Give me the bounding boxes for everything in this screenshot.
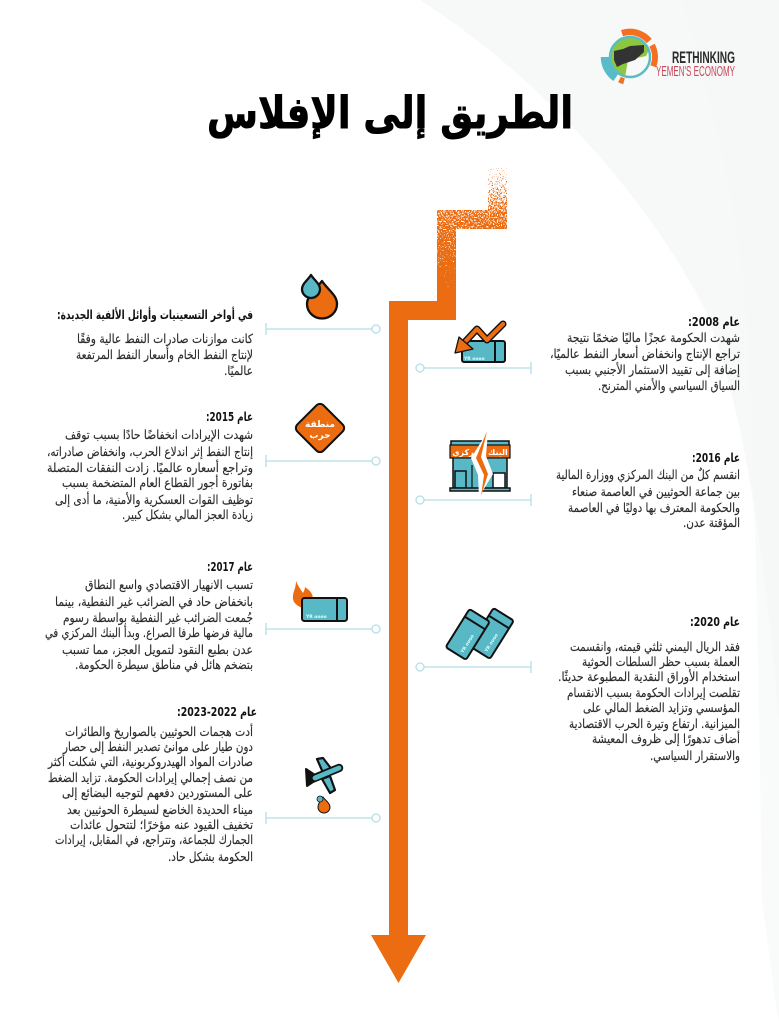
text block: late 1990s: عالميًا.	[224, 363, 253, 378]
icon: war zone sign: حرب	[309, 431, 331, 441]
text block: 2015: وتراجع أسعاره عالميًا. زادت النفقات المتصلة	[47, 459, 253, 476]
icon: two banknotes	[446, 608, 514, 660]
text block: 2015: زيادة العجز المالي بشكل كبير.	[122, 507, 253, 523]
icon: banknote with falling arrow: YR oooo	[463, 356, 485, 362]
icon: split central bank: البنك المركزي	[452, 448, 508, 457]
descending timeline arrow	[371, 168, 507, 983]
text block: 2015: توظيف القوات العسكرية والأمنية، ما أدى إلى	[55, 491, 253, 508]
arrow shaft and head	[371, 338, 426, 983]
text block: 2020: تقلصت إيرادات الحكومة بسبب الانقسام	[567, 685, 740, 701]
connector: 2022-2023	[266, 812, 380, 824]
text block: 2017: جُمعت الضرائب غير النفطية بواسطة رسوم	[63, 610, 253, 626]
text block: 2008	[550, 314, 740, 394]
text block: 2022-2023: أدت هجمات الحوثيين بالصواريخ والطائرات	[65, 723, 253, 740]
text block: 2017: عدن بطبع النقود لتمويل العجز، مما تسبب	[62, 642, 253, 658]
text block: 2022-2023	[47, 704, 257, 865]
title: الطريق إلى الإفلاس	[207, 88, 573, 139]
logo ring and map	[605, 32, 655, 81]
text block: late 1990s	[57, 306, 253, 378]
text block: late 1990s: في أواخر التسعينيات وأوائل الألفية الجديدة:	[57, 306, 253, 322]
text block: 2020	[558, 614, 740, 764]
text block: 2015: شهدت الإيرادات انخفاضًا حادًا بسبب توقف	[65, 427, 253, 443]
text block: 2022-2023: دون طيار على موانئ تصدير النفط إلى حصار	[62, 739, 253, 755]
icon: banknote with falling arrow	[455, 324, 505, 362]
speckled fading staircase	[389, 168, 507, 340]
text block: 2008: إضافة إلى تقييد الاستثمار الأجنبي بسبب	[565, 362, 740, 378]
text block: 2022-2023: صادرات المواد الهيدروكربونية، التي شكلت أكثر	[47, 753, 253, 770]
logo wordmark: RETHINKING	[672, 48, 735, 67]
logo wordmark	[656, 48, 735, 80]
text block: 2020: العملة بسبب حظر السلطات الحوثية	[582, 654, 740, 670]
icon: burning banknote	[293, 581, 347, 621]
text block: 2015: بفاتورة أجور القطاع العام المتضخمة بسبب	[62, 474, 253, 491]
text block: 2020: فقد الريال اليمني ثلثي قيمته، وانقسمت	[570, 639, 740, 655]
text block: 2022-2023: ميناء الحديدة الخاضع لسيطرة الحوثيين بعد	[67, 802, 253, 818]
text block: 2016: والحكومة المعترف بها دوليًا في العاصمة	[568, 500, 740, 516]
icon: burning banknote: YR oooo	[305, 614, 327, 620]
connector: 2016	[416, 494, 531, 506]
connector: 2008	[416, 362, 531, 374]
text block: 2008: عام 2008:	[688, 314, 740, 330]
text block: 2016: المؤقتة عدن.	[683, 515, 740, 531]
text block: 2016	[556, 450, 740, 531]
text block: 2022-2023: عام 2022-2023:	[177, 704, 257, 720]
text block: 2008: شهدت الحكومة عجزًا ماليًا ضخمًا نتيجة	[567, 330, 740, 346]
text block: 2020: المؤسسي وتزايد الضغط المالي على	[583, 700, 740, 716]
text block: 2020: أضاف تدهورًا إلى ظروف المعيشة	[592, 730, 740, 747]
icon: plane with oil drop	[306, 758, 339, 813]
text block: 2017: بتضخم هائل في مناطق سيطرة الحكومة.	[75, 657, 253, 673]
logo: Rethinking Yemen's Economy	[605, 32, 735, 81]
connector: 2015	[266, 455, 380, 467]
text block: 2022-2023: الجمارك للجماعة، وتتراجع، في المقابل، إيرادات	[55, 832, 253, 848]
text block: 2016: بين جماعة الحوثيين في العاصمة صنعاء	[572, 484, 740, 500]
front note: YR oooo	[459, 634, 476, 655]
text block: 2008: تراجع الإنتاج وانخفاض أسعار النفط عالميًا،	[550, 345, 740, 362]
text block: 2020: والاستقرار السياسي.	[650, 748, 740, 764]
text block: 2020: الميزانية. ارتفاع وتيرة الحرب الاقتصادية	[569, 716, 740, 732]
text block: 2015	[47, 409, 253, 523]
icon: war zone sign: منطقة	[305, 420, 335, 430]
icon: split central bank	[450, 431, 510, 497]
text block: 2017	[45, 559, 253, 673]
text block: 2016: عام 2016:	[692, 450, 740, 466]
text block: 2022-2023: من نصف إجمالي إيرادات الحكومة. تزايد الضغط	[48, 770, 253, 786]
back note: YR oooo	[483, 633, 500, 654]
text block: 2016: انقسم كلٌ من البنك المركزي ووزارة المالية	[556, 467, 740, 483]
text block: late 1990s: كانت موازنات صادرات النفط عالية وفقًا	[77, 331, 253, 347]
text block: 2022-2023: تخفيف القيود عنه مؤخرًا؛ لتتحول عائدات	[70, 817, 253, 833]
text block: 2008: السياق السياسي والأمني المترنح.	[598, 378, 740, 394]
text block: 2015: عام 2015:	[206, 409, 253, 425]
text block: 2022-2023: على المستوردين دفعهم لتوجيه البضائع إلى	[62, 785, 253, 801]
text block: 2022-2023: الحكومة بشكل حاد.	[168, 849, 253, 865]
connector: 2017	[266, 623, 380, 635]
text block: 2020: استخدام الأوراق النقدية المطبوعة حديثًا.	[558, 669, 740, 685]
text block: 2017: بانخفاض حاد في الضرائب غير النفطية، بينما	[55, 594, 253, 610]
text block: 2015: إنتاج النفط إثر اندلاع الحرب، وانخفاض صادراته،	[47, 444, 253, 460]
text block: 2020: عام 2020:	[690, 614, 740, 630]
text block: 2017: تسبب الانهيار الاقتصادي واسع النطاق	[85, 577, 253, 593]
connector: 1990s	[266, 323, 380, 335]
text block: 2017: مالية فرضها طرفا الصراع. وبدأ البنك المركزي في	[45, 624, 253, 641]
icon: oil drops	[302, 275, 337, 318]
text block: 2017: عام 2017:	[207, 559, 253, 575]
icon: war zone sign	[294, 402, 346, 454]
connector: 2020	[416, 661, 531, 673]
text block: late 1990s: لإنتاج النفط الخام وأسعار النفط المرتفعة	[76, 346, 253, 363]
